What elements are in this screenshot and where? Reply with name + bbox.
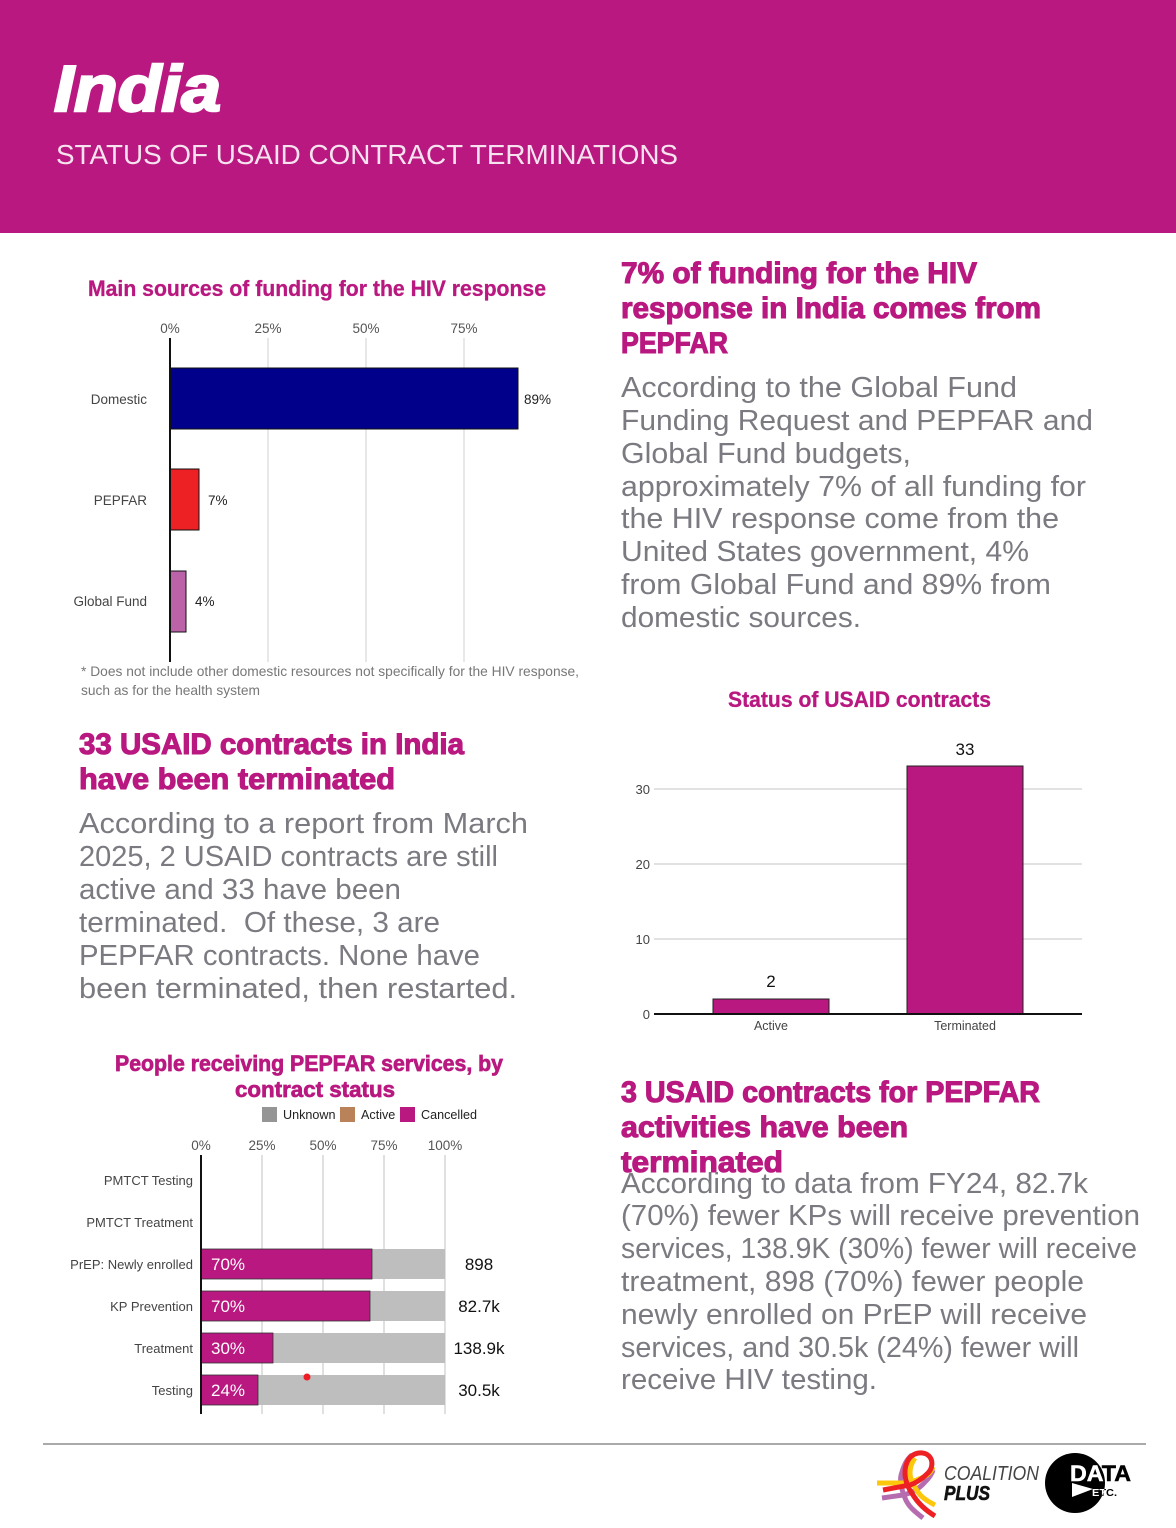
text block: PEPFAR impact description: treatment, 898 (70%) fewer people <box>621 1266 1084 1298</box>
logo: Data Etc: ETC. <box>1092 1487 1117 1499</box>
row: Testing <box>152 1375 500 1405</box>
header banner <box>0 0 1176 233</box>
row: PrEP Newly enrolled: 70% <box>211 1255 245 1274</box>
chart title: contract status <box>235 1077 395 1102</box>
logo text: COALITION <box>944 1463 1039 1485</box>
panel: funding sources chart: 25% <box>254 321 282 336</box>
logo: Data Etc: ETC. <box>1092 1487 1117 1499</box>
legend: Unknown <box>283 1108 336 1122</box>
text block: contracts description <box>79 808 528 1005</box>
logo: Coalition Plus <box>877 1453 1039 1518</box>
panel: PEPFAR services chart: 100% <box>428 1138 462 1153</box>
panel: PEPFAR services chart: 25% <box>248 1138 276 1153</box>
logo: Data Etc: DATA <box>1070 1461 1131 1486</box>
title: India <box>54 52 221 125</box>
bar: Global Fund: 4% <box>195 594 215 609</box>
panel: funding sources chart: 50% <box>352 321 380 336</box>
bar: PEPFAR <box>94 469 228 530</box>
bar: Active <box>713 972 829 1033</box>
text block: contracts description: 2025, 2 USAID contracts are still <box>79 841 498 873</box>
panel: USAID contract status chart: 10 <box>636 932 650 947</box>
heading: 7% of funding: response in India comes from <box>621 292 1041 325</box>
row: PrEP Newly enrolled <box>70 1249 493 1279</box>
panel: USAID contract status chart: 20 <box>636 857 650 872</box>
text block: funding description: Global Fund budgets, <box>621 438 911 470</box>
text block: PEPFAR impact description: receive HIV testing. <box>621 1364 877 1396</box>
bar: Domestic <box>91 368 551 429</box>
row: Treatment: 138.9k <box>453 1339 505 1358</box>
text block: funding description: According to the Global Fund <box>621 372 1017 404</box>
text block: PEPFAR impact description: newly enrolled on PrEP will receive <box>621 1299 1087 1331</box>
red dot marker <box>304 1374 310 1380</box>
footnote <box>81 663 579 698</box>
heading: 7% of funding <box>621 257 1041 360</box>
row: KP Prevention: KP Prevention <box>110 1299 193 1314</box>
text block: funding description: approximately 7% of all funding for <box>621 471 1086 503</box>
logo: Data Etc <box>1045 1453 1131 1513</box>
subtitle: STATUS OF USAID CONTRACT TERMINATIONS <box>56 139 678 170</box>
text block: funding description: the HIV response come from the <box>621 503 1059 535</box>
heading: 33 USAID contracts: 33 USAID contracts in India <box>79 728 464 761</box>
row: KP Prevention: 82.7k <box>458 1297 500 1316</box>
logo: Data Etc: DATA <box>1070 1461 1131 1486</box>
text block: funding description <box>621 372 1093 634</box>
bar: Domestic: Domestic <box>91 392 147 407</box>
bar: Active: 2 <box>766 972 776 991</box>
row: PrEP Newly enrolled: PrEP: Newly enrolled <box>70 1257 193 1272</box>
text block: PEPFAR impact description <box>621 1168 1140 1396</box>
text block: funding description: domestic sources. <box>621 602 861 634</box>
text block: PEPFAR impact description: services, 138.9K (30%) fewer will receive <box>621 1233 1137 1265</box>
heading: 33 USAID contracts: have been terminated <box>79 763 395 796</box>
heading: 3 USAID contracts: activities have been <box>621 1111 908 1144</box>
bar: PEPFAR: 7% <box>208 493 228 508</box>
row: KP Prevention <box>110 1291 500 1321</box>
text block: funding description: Funding Request and PEPFAR and <box>621 405 1093 437</box>
text block: PEPFAR impact description: According to data from FY24, 82.7k <box>621 1168 1089 1200</box>
heading: 3 USAID contracts <box>621 1076 1040 1179</box>
bar: Terminated <box>907 740 1023 1033</box>
panel: PEPFAR services chart <box>70 1051 505 1414</box>
bar: Active: Active <box>754 1019 788 1033</box>
panel: PEPFAR services chart: 75% <box>370 1138 398 1153</box>
legend: Active <box>361 1108 395 1122</box>
heading: 3 USAID contracts: 3 USAID contracts for PEPFAR <box>621 1076 1040 1109</box>
heading: 7% of funding: PEPFAR <box>621 327 728 360</box>
footnote: such as for the health system <box>81 682 260 698</box>
panel: USAID contract status chart: 0 <box>643 1007 650 1022</box>
heading: 7% of funding: 7% of funding for the HIV <box>621 257 977 290</box>
chart title: People receiving PEPFAR services, by <box>115 1051 504 1076</box>
row: Testing: 30.5k <box>458 1381 500 1400</box>
text block: contracts description: been terminated, then restarted. <box>79 973 517 1005</box>
panel: USAID contract status chart: 30 <box>636 782 650 797</box>
bar: PEPFAR: PEPFAR <box>94 493 147 508</box>
bar: Domestic: 89% <box>524 392 551 407</box>
row: Treatment <box>134 1333 505 1363</box>
row: PMTCT Testing: PMTCT Testing <box>104 1173 193 1188</box>
bar: Terminated: 33 <box>956 740 974 759</box>
heading: 33 USAID contracts <box>79 728 464 796</box>
row: KP Prevention: 70% <box>211 1297 245 1316</box>
panel: PEPFAR services chart: 50% <box>309 1138 337 1153</box>
row: PrEP Newly enrolled: 898 <box>465 1255 493 1274</box>
text block: PEPFAR impact description: services, and 30.5k (24%) fewer will <box>621 1332 1079 1364</box>
row: Testing: 24% <box>211 1381 245 1400</box>
chart title <box>115 1051 504 1102</box>
logo: Coalition Plus: PLUS <box>944 1483 991 1505</box>
text block: contracts description: According to a report from March <box>79 808 528 840</box>
bar: Global Fund: Global Fund <box>73 594 147 609</box>
row: PMTCT Treatment: PMTCT Treatment <box>86 1215 193 1230</box>
row: Testing: Testing <box>152 1383 193 1398</box>
bar: Terminated: Terminated <box>934 1019 996 1033</box>
text block: PEPFAR impact description: (70%) fewer KPs will receive prevention <box>621 1200 1140 1232</box>
row: Treatment: 30% <box>211 1339 245 1358</box>
panel: funding sources chart <box>73 276 551 662</box>
text block: funding description: from Global Fund and 89% from <box>621 569 1051 601</box>
panel: funding sources chart: 75% <box>450 321 478 336</box>
panel: PEPFAR services chart: 0% <box>191 1138 211 1153</box>
icon: ribbon <box>877 1453 935 1518</box>
panel: funding sources chart: 0% <box>160 321 180 336</box>
footnote: * Does not include other domestic resources not specifically for the HIV response, <box>81 663 579 679</box>
bar: Global Fund <box>73 571 215 632</box>
text block: funding description: United States government, 4% <box>621 536 1029 568</box>
text block: contracts description: active and 33 have been <box>79 874 401 906</box>
panel: USAID contract status chart <box>636 687 1082 1033</box>
chart title: Main sources of funding for the HIV response <box>88 276 546 301</box>
heading: 3 USAID contracts: terminated <box>621 1146 783 1179</box>
legend: Cancelled <box>421 1108 477 1122</box>
row: Treatment: Treatment <box>134 1341 193 1356</box>
chart title: Status of USAID contracts <box>728 687 991 712</box>
legend <box>262 1107 477 1122</box>
text block: contracts description: terminated. Of these, 3 are <box>79 907 440 939</box>
text block: contracts description: PEPFAR contracts. None have <box>79 940 480 972</box>
